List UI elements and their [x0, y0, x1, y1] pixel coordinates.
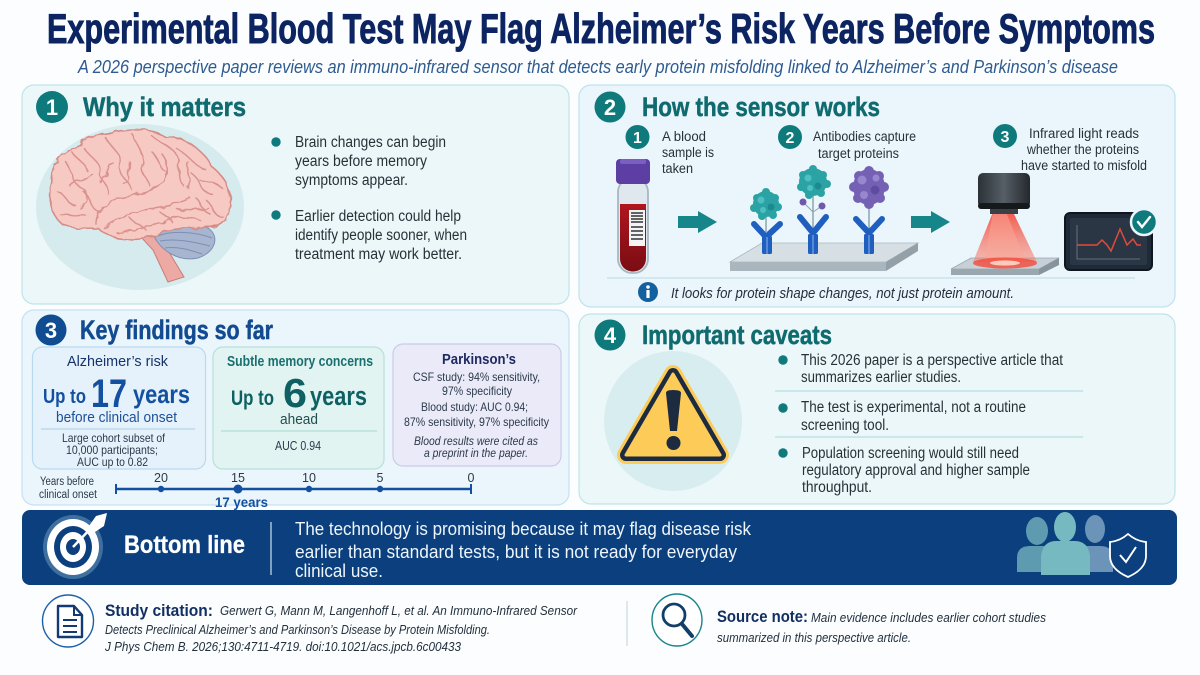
step 3 label: whether the proteins: [1026, 142, 1139, 157]
step 3 label: Infrared light reads: [1029, 126, 1139, 141]
bullet list: screening tool.: [801, 417, 889, 434]
card: subtle memory concerns: ahead: [280, 411, 318, 428]
icon: brain: [36, 124, 244, 290]
heading: how the sensor works: How the sensor works: [642, 92, 880, 122]
step 1 label: sample is: [662, 145, 714, 160]
footer: study citation: Gerwert G, Mann M, Langenhoff L, et al. An Immuno-Infrared Sensor: [220, 604, 578, 618]
card: subtle memory concerns: years: [310, 381, 367, 411]
footer: study citation: J Phys Chem B. 2026;130:4711-4719. doi:10.1021/acs.jpcb.6c00433: [104, 640, 461, 654]
step 2 label: target proteins: [818, 146, 899, 161]
card: Alzheimer's risk: [32, 347, 206, 469]
icon: info: [638, 282, 658, 302]
footer: source note: Main evidence includes earlier cohort studies: [811, 611, 1046, 625]
number badge 2: 2: [604, 95, 616, 120]
step 1 label: taken: [662, 161, 693, 176]
timeline: 15: [231, 471, 245, 485]
card: Alzheimer's risk: 10,000 participants;: [66, 443, 158, 457]
card: Alzheimer's risk: Up to: [43, 386, 86, 408]
card: Alzheimer's risk: before clinical onset: [56, 409, 178, 426]
panel: how the sensor works: [579, 85, 1175, 307]
statement: clinical use.: [295, 561, 383, 581]
statement: The technology is promising because it may flag disease risk: [295, 519, 752, 539]
timeline: clinical onset: [39, 489, 98, 501]
footer: source note: [652, 594, 1046, 646]
number badge 4: [594, 320, 626, 350]
timeline: [39, 471, 475, 510]
icon: blood tube: [616, 159, 650, 273]
step 1 label: 1: [633, 130, 642, 147]
number badge 1: [36, 91, 68, 123]
card: subtle memory concerns: AUC 0.94: [275, 439, 321, 453]
card: Alzheimer's risk: 17: [91, 372, 127, 416]
heading: important caveats: Important caveats: [642, 320, 832, 350]
label: Bottom line: [124, 531, 245, 559]
bullet list: treatment may work better.: [295, 246, 462, 263]
bullet list: Brain changes can begin: [295, 134, 446, 151]
bullet list: throughput.: [802, 479, 872, 496]
bullet list: Earlier detection could help: [295, 208, 461, 225]
icon: warning triangle: [604, 351, 742, 491]
arrow: [911, 211, 950, 233]
step 2 label: 2: [786, 130, 795, 147]
number badge 2: [594, 92, 626, 122]
card: Alzheimer's risk: AUC up to 0.82: [77, 455, 148, 469]
statement: [295, 519, 752, 581]
number badge 1: 1: [46, 95, 58, 120]
statement: earlier than standard tests, but it is not ready for everyday: [295, 542, 737, 562]
card: Parkinson's: Parkinson’s: [442, 352, 516, 368]
bullet list: The test is experimental, not a routine: [801, 399, 1026, 416]
footer: source note: summarized in this perspective article.: [717, 631, 911, 645]
heading: why it matters: Why it matters: [83, 92, 246, 122]
arrow: [678, 211, 717, 233]
number badge 4: 4: [604, 323, 617, 348]
card: Parkinson's: Blood results were cited as: [414, 434, 538, 448]
panel: key findings so far: [22, 310, 569, 510]
card: Parkinson's: 97% specificity: [442, 384, 512, 398]
timeline: 0: [468, 471, 475, 485]
card: subtle memory concerns: Up to: [231, 387, 274, 410]
step 3 label: have started to misfold: [1021, 158, 1147, 173]
bullet list: [271, 134, 467, 263]
card: Parkinson's: 87% sensitivity, 97% specificity: [404, 415, 549, 429]
step 2 label: [778, 125, 916, 161]
icon: monitor with check: [1065, 209, 1157, 270]
step 3 label: 3: [1001, 129, 1010, 146]
card: Parkinson's: Blood study: AUC 0.94;: [421, 400, 528, 414]
note: It looks for protein shape changes, not just protein amount.: [671, 285, 1014, 302]
icon: people with shield: [1017, 512, 1146, 577]
heading: key findings: Key findings so far: [80, 315, 273, 345]
footer: source note: Source note:: [717, 608, 808, 626]
bullet list: summarizes earlier studies.: [801, 369, 961, 386]
card: subtle memory concerns: Subtle memory concerns: [227, 354, 373, 370]
bullet list: This 2026 paper is a perspective article that: [801, 352, 1064, 369]
number badge 3: 3: [45, 318, 57, 343]
card: Alzheimer's risk: Large cohort subset of: [62, 431, 166, 445]
step 1 label: [626, 125, 714, 176]
bullet list: [775, 352, 1083, 496]
step 1 label: A blood: [662, 129, 706, 144]
card: subtle memory concerns: [213, 347, 384, 469]
card: Alzheimer's risk: Alzheimer’s risk: [67, 354, 169, 370]
bullet list: years before memory: [295, 153, 427, 170]
sensor slide with antibodies: [730, 165, 918, 271]
step 3 label: [993, 124, 1147, 173]
timeline: 5: [377, 471, 384, 485]
step 2 label: Antibodies capture: [813, 129, 916, 144]
footer: study citation: Study citation:: [105, 602, 213, 620]
icon: document: [42, 595, 94, 647]
bullet list: identify people sooner, when: [295, 227, 467, 244]
bullet list: regulatory approval and higher sample: [802, 462, 1030, 479]
card: Parkinson's: [393, 344, 561, 466]
timeline: 20: [154, 471, 168, 485]
panel: important caveats: [579, 314, 1175, 504]
subtitle: A 2026 perspective paper reviews an immuno-infrared sensor that detects early protein misfolding linked to Alzheimer’s and Parkinson’s disease: [77, 57, 1118, 77]
card: Parkinson's: CSF study: 94% sensitivity,: [413, 370, 540, 384]
footer: study citation: [42, 595, 578, 654]
number badge 3: [36, 314, 66, 346]
timeline: 17 years: [215, 495, 268, 510]
icon: target: [43, 513, 107, 579]
panel: why it matters: [22, 85, 569, 304]
icon: magnifier: [652, 594, 702, 646]
bullet list: Population screening would still need: [802, 445, 1019, 462]
card: Parkinson's: a preprint in the paper.: [424, 446, 528, 460]
timeline: 10: [302, 471, 316, 485]
card: Alzheimer's risk: years: [133, 379, 190, 409]
bullet list: symptoms appear.: [295, 172, 408, 189]
card: subtle memory concerns: 6: [283, 370, 307, 416]
banner: bottom line: [22, 510, 1177, 585]
footer: study citation: Detects Preclinical Alzheimer’s and Parkinson’s Disease by Protein Misfolding.: [105, 623, 490, 637]
timeline: Years before: [40, 476, 94, 488]
icon: infrared reader: [951, 173, 1059, 275]
